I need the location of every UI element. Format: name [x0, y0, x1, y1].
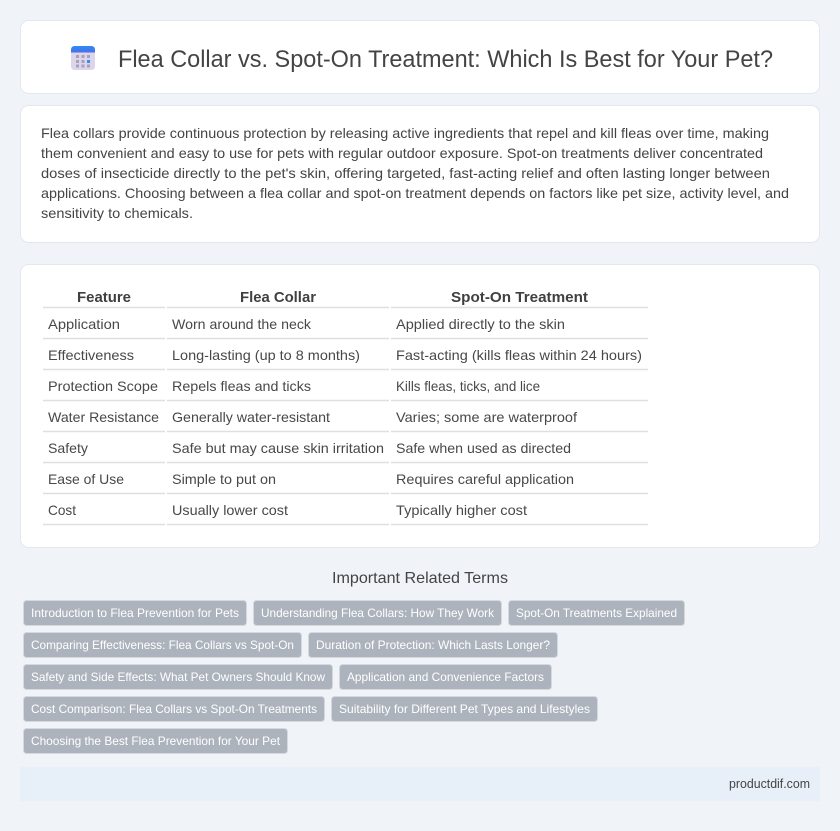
table row: effectiveness: Long-lasting (up to 8 months) [172, 347, 360, 363]
tag: Understanding Flea Collars: How They Work [261, 606, 495, 620]
text block: introduction paragraph: applications. Choosing between a flea collar and spot-on treatment depends on factors like pet size, activity level, and [41, 185, 789, 201]
tag: Choosing the Best Flea Prevention for Your Pet [31, 734, 281, 748]
tag: Comparing Effectiveness: Flea Collars vs Spot-On [31, 638, 294, 652]
tag: Cost Comparison: Flea Collars vs Spot-On Treatments [31, 702, 317, 716]
text block: introduction paragraph: Flea collars provide continuous protection by releasing active ingredients that repel and kill fleas over time, making [41, 125, 769, 141]
table header: Spot-On Treatment [451, 289, 588, 306]
table header: Feature [77, 289, 131, 306]
table row: protection scope: Kills fleas, ticks, and lice [396, 378, 540, 394]
footer: productdif.com [729, 776, 810, 791]
table row: water resistance: Water Resistance [48, 409, 159, 425]
text block: introduction paragraph: them convenient and easy to use for pets with regular outdoor exposure. Spot-on treatments deliver concentrated [41, 145, 763, 161]
text block: introduction paragraph: doses of insecticide directly to the pet's skin, offering targeted, fast-acting relief and often lasting longer between [41, 165, 770, 181]
tag [340, 664, 552, 690]
tag: Spot-On Treatments Explained [516, 606, 677, 620]
table row: safety: Safety [48, 440, 88, 456]
table row: cost: Typically higher cost [396, 502, 527, 518]
tag [24, 728, 288, 754]
table row: water resistance [43, 409, 648, 432]
table row: cost: Usually lower cost [172, 502, 288, 518]
tag: Application and Convenience Factors [347, 670, 544, 684]
table row: ease of use: Simple to put on [172, 471, 276, 487]
table header: Flea Collar [240, 289, 316, 306]
table row: ease of use: Requires careful application [396, 471, 574, 487]
table row: safety: Safe when used as directed [396, 440, 571, 456]
tag [254, 600, 502, 626]
tag [24, 664, 332, 690]
table row: safety: Safe but may cause skin irritation [172, 440, 384, 456]
tag: Safety and Side Effects: What Pet Owners Should Know [31, 670, 325, 684]
table row: cost: Cost [48, 502, 76, 518]
table row: ease of use: Ease of Use [48, 471, 124, 487]
tag [24, 600, 246, 626]
tag [308, 632, 558, 658]
table row: ease of use [43, 471, 648, 494]
tag [508, 600, 684, 626]
title: Flea Collar vs. Spot-On Treatment: Which Is Best for Your Pet? [118, 46, 773, 73]
text block: introduction paragraph: sensitivity to chemicals. [41, 205, 193, 221]
table row: application: Worn around the neck [172, 316, 312, 332]
tag: Suitability for Different Pet Types and Lifestyles [339, 702, 590, 716]
panel: header [20, 20, 820, 94]
table row: effectiveness: Fast-acting (kills fleas within 24 hours) [396, 347, 642, 363]
tag [24, 632, 302, 658]
table header [43, 289, 648, 308]
tag [24, 696, 324, 722]
panel: introduction [20, 106, 820, 242]
tag [332, 696, 598, 722]
footer [20, 767, 820, 801]
tag: Introduction to Flea Prevention for Pets [31, 606, 239, 620]
table row: effectiveness: Effectiveness [48, 347, 134, 363]
table row: water resistance: Generally water-resistant [172, 409, 330, 425]
panel: comparison table [20, 264, 820, 548]
tag: Duration of Protection: Which Lasts Longer? [316, 638, 550, 652]
table row: application [43, 316, 648, 338]
table row: water resistance: Varies; some are waterproof [396, 409, 577, 425]
table row: application: Applied directly to the skin [396, 316, 565, 332]
table row: protection scope: Protection Scope [48, 378, 158, 394]
icon: calendar [71, 46, 95, 70]
table row: application: Application [48, 316, 120, 332]
heading: related terms: Important Related Terms [332, 570, 508, 587]
table row: protection scope: Repels fleas and ticks [172, 378, 311, 394]
table row: safety [43, 440, 648, 462]
table row: cost [43, 502, 648, 524]
table row: effectiveness [43, 347, 648, 370]
table row: protection scope [43, 378, 648, 400]
related term tags [24, 600, 684, 754]
text block: introduction paragraph [41, 125, 789, 221]
